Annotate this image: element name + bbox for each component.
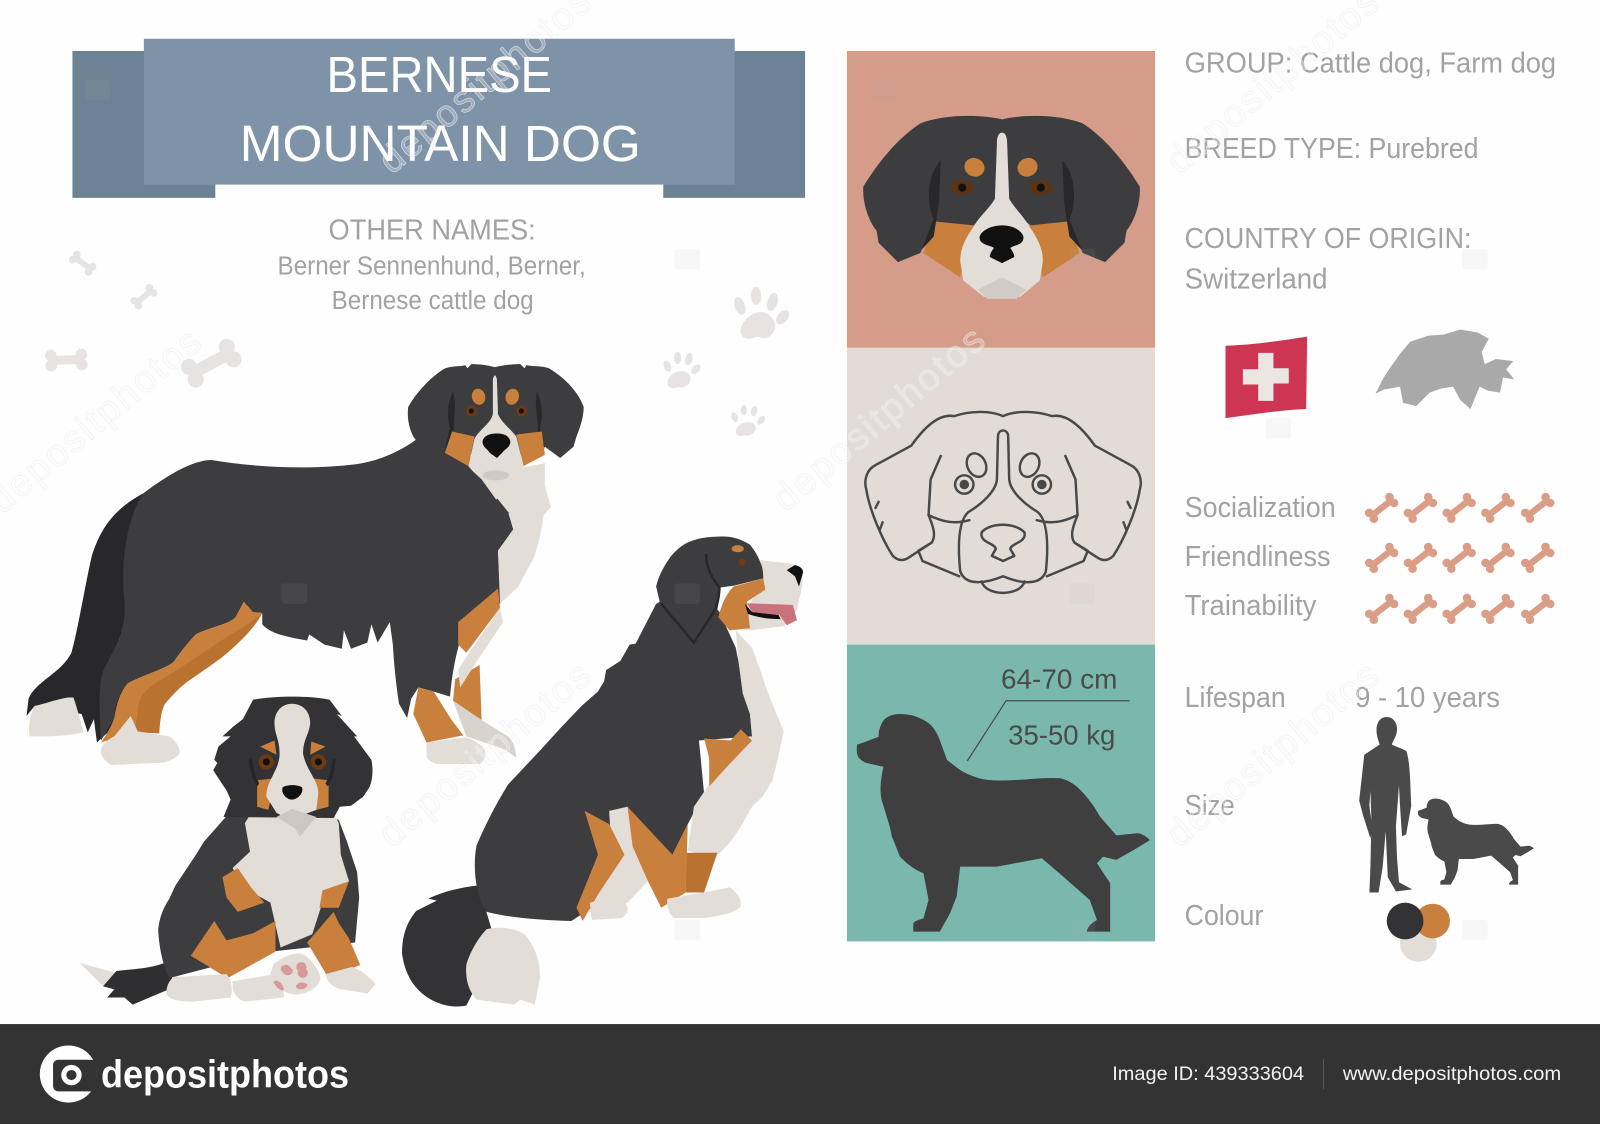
website: www.depositphotos.com xyxy=(1342,1063,1561,1085)
decorative bones and paws xyxy=(45,249,792,436)
other names text block: OTHER NAMES: xyxy=(329,215,536,247)
footer logo text: depositphotos xyxy=(101,1053,349,1096)
icon: human silhouette xyxy=(1359,717,1412,892)
standing adult dog xyxy=(27,364,584,765)
watermarks xyxy=(0,0,1386,855)
watermark camera marks xyxy=(85,80,1488,940)
other names text block: Bernese cattle dog xyxy=(332,287,534,315)
watermarks: depositphotos xyxy=(764,318,993,519)
ratings: friendliness xyxy=(1185,541,1556,575)
watermarks: depositphotos xyxy=(1158,653,1386,855)
panel: measurements xyxy=(847,645,1155,941)
footer logo mark xyxy=(40,1045,97,1103)
ratings: socialization xyxy=(1185,491,1556,525)
standing dog head xyxy=(408,364,584,500)
lifespan row: Lifespan xyxy=(1185,682,1286,714)
puppy sitting xyxy=(80,697,376,1005)
ratings: trainability: Trainability xyxy=(1185,590,1317,622)
info text: country of origin: Switzerland xyxy=(1185,264,1328,296)
lifespan row: 9 - 10 years xyxy=(1355,682,1500,714)
image id: Image ID: 439333604 xyxy=(1112,1063,1304,1085)
icon: map of Switzerland xyxy=(1376,329,1514,409)
icon: dog silhouette xyxy=(857,714,1150,932)
info text: country of origin xyxy=(1185,223,1471,296)
title line 1: BERNESE xyxy=(327,46,552,103)
sitting dog head xyxy=(656,537,803,643)
other names text block: Berner Sennenhund, Berner, xyxy=(278,252,586,280)
ratings: friendliness: Friendliness xyxy=(1185,541,1331,573)
other names text block xyxy=(278,215,586,315)
measurement lines xyxy=(967,701,1130,761)
weight label: 35-50 kg xyxy=(1008,720,1115,751)
standing dog shoulder xyxy=(434,455,509,520)
icon: line-art dog head xyxy=(865,412,1141,593)
height label: 64-70 cm xyxy=(1001,663,1117,694)
colour swatches xyxy=(1387,903,1450,962)
title banner xyxy=(72,39,805,198)
icon: small dog silhouette xyxy=(1418,799,1534,885)
info text: group: GROUP: Cattle dog, Farm dog xyxy=(1185,47,1556,79)
title line 2: MOUNTAIN DOG xyxy=(240,115,641,172)
info text: country of origin: COUNTRY OF ORIGIN: xyxy=(1185,223,1471,255)
ratings: trainability xyxy=(1185,590,1556,626)
panel: coloured face xyxy=(847,51,1155,348)
icon: coloured dog head xyxy=(863,116,1140,299)
puppy head xyxy=(213,697,372,836)
info text: breed type: BREED TYPE: Purebred xyxy=(1185,133,1479,165)
colour label: Colour xyxy=(1185,900,1264,932)
sitting adult dog xyxy=(402,537,803,1006)
lifespan row xyxy=(1185,682,1500,714)
watermarks: depositphotos xyxy=(370,653,599,855)
icon: Swiss flag xyxy=(1226,337,1307,418)
panel: outline face xyxy=(847,348,1155,645)
size label: Size xyxy=(1185,790,1235,822)
ratings: socialization: Socialization xyxy=(1185,492,1336,524)
footer bar xyxy=(0,1024,1600,1124)
